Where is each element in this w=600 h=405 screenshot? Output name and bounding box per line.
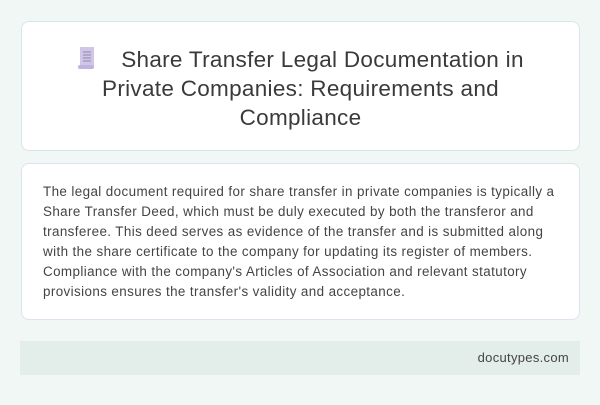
footer	[20, 341, 580, 375]
body paragraph: The legal document required for share transfer in private companies is typically a Share Transfer Deed, which must be duly executed by both the transferor and transferee. This deed serves as evidence of the transfer and is submitted along with the share certificate to the company for updating its register of members. Compliance with the company's Articles of Association and relevant statutory provisions ensures the transfer's validity and acceptance.	[43, 184, 554, 299]
title: Share Transfer Legal Documentation in Private Companies: Requirements and Compliance	[102, 47, 524, 130]
title card	[21, 21, 580, 151]
footer: docutypes.com	[478, 350, 569, 365]
body text card	[21, 163, 580, 320]
icon: document	[78, 47, 94, 69]
